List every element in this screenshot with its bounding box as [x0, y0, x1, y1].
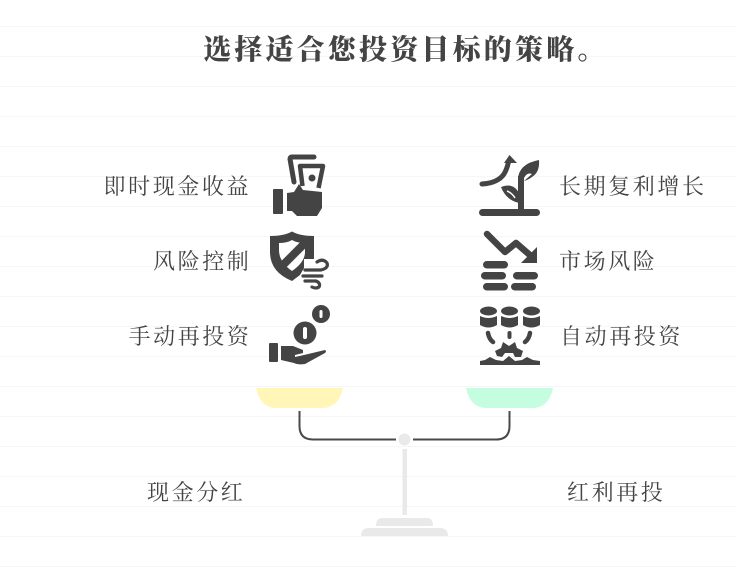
left pan	[256, 388, 343, 408]
icon: sprout with growth arrow	[479, 155, 540, 216]
base	[361, 518, 448, 536]
pivot	[398, 434, 410, 446]
icon: coin stacks and gear	[480, 306, 540, 365]
right pan	[466, 388, 553, 408]
stand	[402, 449, 407, 515]
icon: falling chart and coins	[481, 234, 538, 290]
label: cash dividend: 现金分红	[147, 480, 245, 505]
beam	[300, 411, 510, 440]
icon: shield with wind	[270, 232, 327, 288]
label: immediate cash income: 即时现金收益	[104, 174, 251, 199]
icon: hand with cash	[273, 157, 323, 216]
label: manual reinvestment: 手动再投资	[128, 324, 252, 349]
label: dividend reinvestment: 红利再投	[567, 480, 665, 505]
label: automatic reinvestment: 自动再投资	[560, 324, 683, 349]
icon: hand with coins	[269, 305, 330, 364]
balance scale	[256, 388, 553, 536]
title: 选择适合您投资目标的策略。	[203, 33, 609, 66]
label: long-term compound growth: 长期复利增长	[559, 174, 707, 199]
label: market risk: 市场风险	[559, 249, 657, 274]
label: risk control: 风险控制	[153, 249, 251, 274]
